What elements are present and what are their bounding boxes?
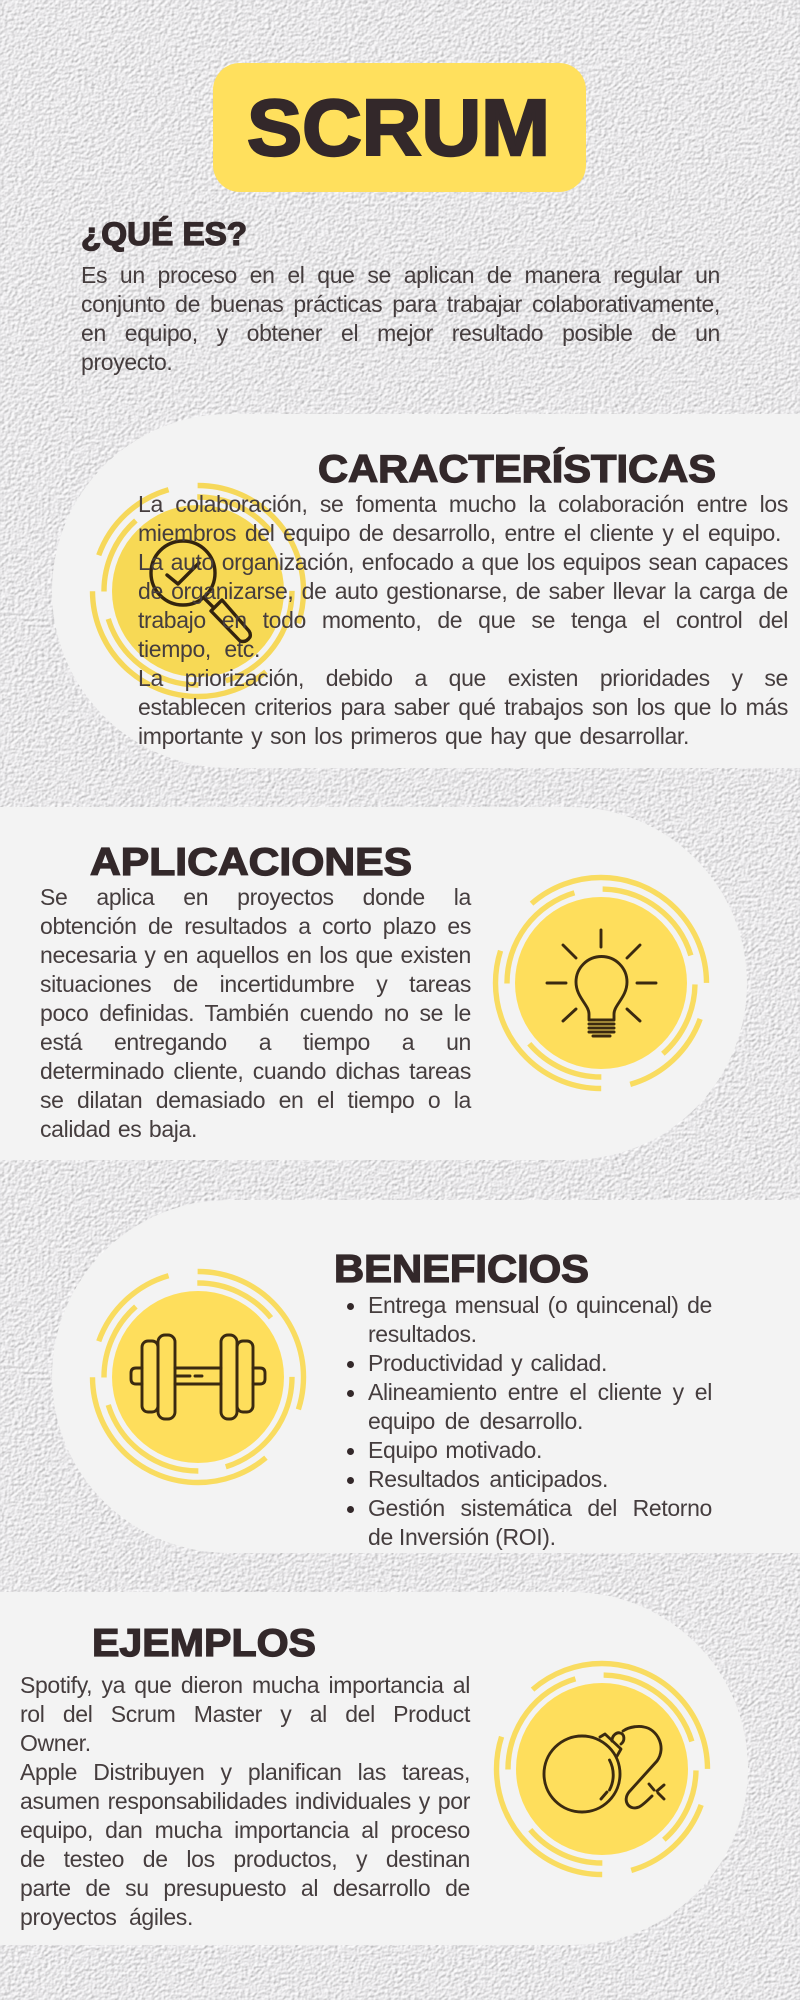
text block: aplicaciones: determinado cliente, cuando dichas tareas: [40, 1058, 471, 1084]
text block: características: [138, 491, 788, 749]
text block: ejemplos: [20, 1672, 470, 1930]
text block: características: La auto organización, enfocado a que los equipos sean capaces: [138, 549, 788, 575]
text block: aplicaciones: calidad es baja.: [40, 1116, 197, 1142]
text block: ejemplos: equipo, dan mucha importancia al proceso: [20, 1817, 470, 1843]
heading: beneficios: BENEFICIOS: [334, 1248, 589, 1291]
text block: beneficios list: Resultados anticipados.: [368, 1466, 608, 1492]
text block: aplicaciones: obtención de resultados a corto plazo es: [40, 913, 471, 939]
text block: aplicaciones: necesaria y en aquellos en los que existen: [40, 942, 471, 968]
text block: características: de organizarse, de auto gestionarse, de saber llevar la carga de: [138, 578, 788, 604]
heading: características: CARACTERÍSTICAS: [318, 447, 716, 491]
text block: aplicaciones: poco definidas. También cuendo no se le: [40, 1000, 471, 1026]
text block: definition: en equipo, y obtener el mejor resultado posible de un: [81, 320, 720, 346]
text block: características: La priorización, debido a que existen prioridades y se: [138, 665, 788, 691]
text block: aplicaciones: se dilatan demasiado en el tiempo o la: [40, 1087, 471, 1113]
text block: características: miembros del equipo de desarrollo, entre el cliente y el equipo.: [138, 520, 781, 546]
icon: light bulb in yellow circle: [492, 874, 710, 1092]
text block: ejemplos: asumen responsabilidades individuales y por: [20, 1788, 470, 1814]
panel: ejemplos: [0, 1592, 748, 1945]
text block: beneficios list: equipo de desarrollo.: [368, 1408, 583, 1434]
text block: aplicaciones: [40, 884, 472, 1142]
text block: beneficios list: Productividad y calidad.: [368, 1350, 607, 1376]
icon: dumbbell in yellow circle: [90, 1268, 306, 1486]
panel: características: [52, 414, 800, 768]
icon: bomb in yellow circle: [494, 1660, 710, 1878]
text block: ejemplos: parte de su presupuesto al desarrollo de: [20, 1875, 470, 1901]
panel: beneficios: [52, 1200, 800, 1553]
text block: ejemplos: Apple Distribuyen y planifican las tareas,: [20, 1759, 470, 1785]
text block: características: tiempo, etc.: [138, 636, 260, 662]
title: SCRUM pill: [213, 63, 586, 192]
text block: ejemplos: Spotify, ya que dieron mucha importancia al: [20, 1672, 470, 1698]
text block: características: establecen criterios para saber qué trabajos son los que lo más: [138, 694, 788, 720]
text block: aplicaciones: Se aplica en proyectos donde la: [40, 884, 471, 910]
text block: beneficios list: resultados.: [368, 1321, 477, 1347]
text block: beneficios list: de Inversión (ROI).: [368, 1524, 556, 1550]
icon: magnifier in yellow circle: [90, 482, 306, 700]
panel: aplicaciones: [0, 807, 747, 1160]
heading: aplicaciones: APLICACIONES: [90, 841, 412, 884]
heading: ejemplos: EJEMPLOS: [92, 1622, 316, 1665]
text block: características: trabajo en todo momento, de que se tenga el control del: [138, 607, 788, 633]
text block: aplicaciones: está entregando a tiempo a un: [40, 1029, 471, 1055]
text block: beneficios list: Gestión sistemática del Retorno: [368, 1495, 712, 1521]
text block: características: La colaboración, se fomenta mucho la colaboración entre los: [138, 491, 788, 517]
text block: definition: conjunto de buenas prácticas para trabajar colaborativamente,: [81, 291, 720, 317]
text block: beneficios list: Alineamiento entre el cliente y el: [368, 1379, 712, 1405]
text block: beneficios list: Entrega mensual (o quincenal) de: [368, 1292, 712, 1318]
text block: ejemplos: proyectos ágiles.: [20, 1904, 193, 1930]
title text: SCRUM: [247, 83, 550, 172]
text block: ejemplos: de testeo de los productos, y destinan: [20, 1846, 470, 1872]
text block: beneficios list: [347, 1292, 712, 1550]
text block: características: importante y son los primeros que hay que desarrollar.: [138, 723, 689, 749]
text block: definition: [81, 262, 720, 375]
text block: definition: proyecto.: [81, 349, 172, 375]
heading: ¿Qué es?: ¿QUÉ ES?: [81, 216, 247, 252]
text block: aplicaciones: situaciones de incertidumbre y tareas: [40, 971, 471, 997]
text block: beneficios list: Equipo motivado.: [368, 1437, 542, 1463]
text block: definition: Es un proceso en el que se aplican de manera regular un: [81, 262, 720, 288]
text block: ejemplos: Owner.: [20, 1730, 91, 1756]
text block: ejemplos: rol del Scrum Master y al del Product: [20, 1701, 470, 1727]
